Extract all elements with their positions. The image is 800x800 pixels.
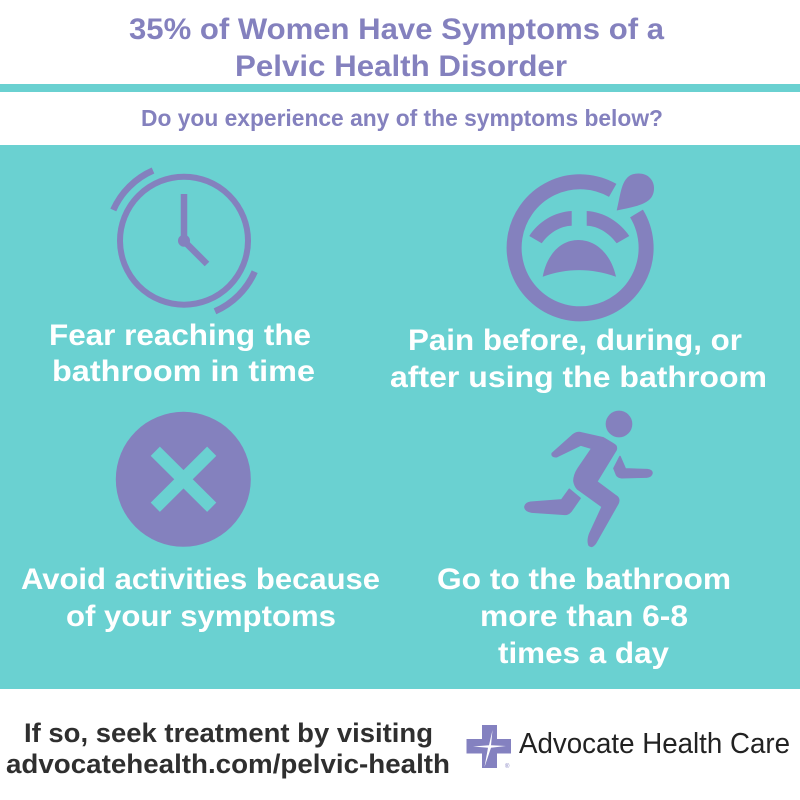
icon: crying face bbox=[514, 174, 654, 314]
symptom: avoid activities: Avoid activities because bbox=[21, 563, 380, 596]
title divider band bbox=[0, 84, 800, 92]
title: 35% of Women Have Symptoms of a bbox=[129, 13, 664, 46]
symptom: avoid activities: of your symptoms bbox=[66, 600, 336, 633]
icon: clock bbox=[113, 170, 255, 311]
symptom: frequent bathroom trips: more than 6-8 bbox=[480, 600, 688, 633]
symptom: fear reaching the bathroom: Fear reaching the bbox=[49, 319, 311, 352]
symptom: frequent bathroom trips: times a day bbox=[498, 637, 669, 670]
call to action bbox=[6, 718, 450, 779]
icon: circled X bbox=[116, 412, 251, 547]
symptom: frequent bathroom trips bbox=[437, 563, 731, 670]
title bbox=[129, 13, 664, 83]
symptom: fear reaching the bathroom: bathroom in time bbox=[52, 355, 315, 388]
icon: running person bbox=[525, 411, 652, 546]
call to action: If so, seek treatment by visiting bbox=[24, 718, 433, 748]
symptom: pain: after using the bathroom bbox=[390, 361, 767, 394]
symptom: avoid activities bbox=[21, 563, 380, 633]
icon: logo cross bbox=[466, 725, 511, 768]
subheading: Do you experience any of the symptoms below? bbox=[141, 105, 663, 131]
call to action: advocatehealth.com/pelvic-health bbox=[6, 749, 450, 779]
symptom: frequent bathroom trips: Go to the bathroom bbox=[437, 563, 731, 596]
registered mark: ® bbox=[505, 763, 510, 770]
symptom: pain bbox=[390, 324, 767, 394]
logo: Advocate Health Care bbox=[466, 725, 790, 770]
title: Pelvic Health Disorder bbox=[235, 50, 567, 83]
symptom: fear reaching the bathroom bbox=[49, 319, 315, 388]
logo: Advocate Health Care: Advocate Health Care bbox=[519, 728, 790, 760]
panel: symptoms bbox=[0, 145, 800, 689]
symptom: pain: Pain before, during, or bbox=[408, 324, 742, 357]
